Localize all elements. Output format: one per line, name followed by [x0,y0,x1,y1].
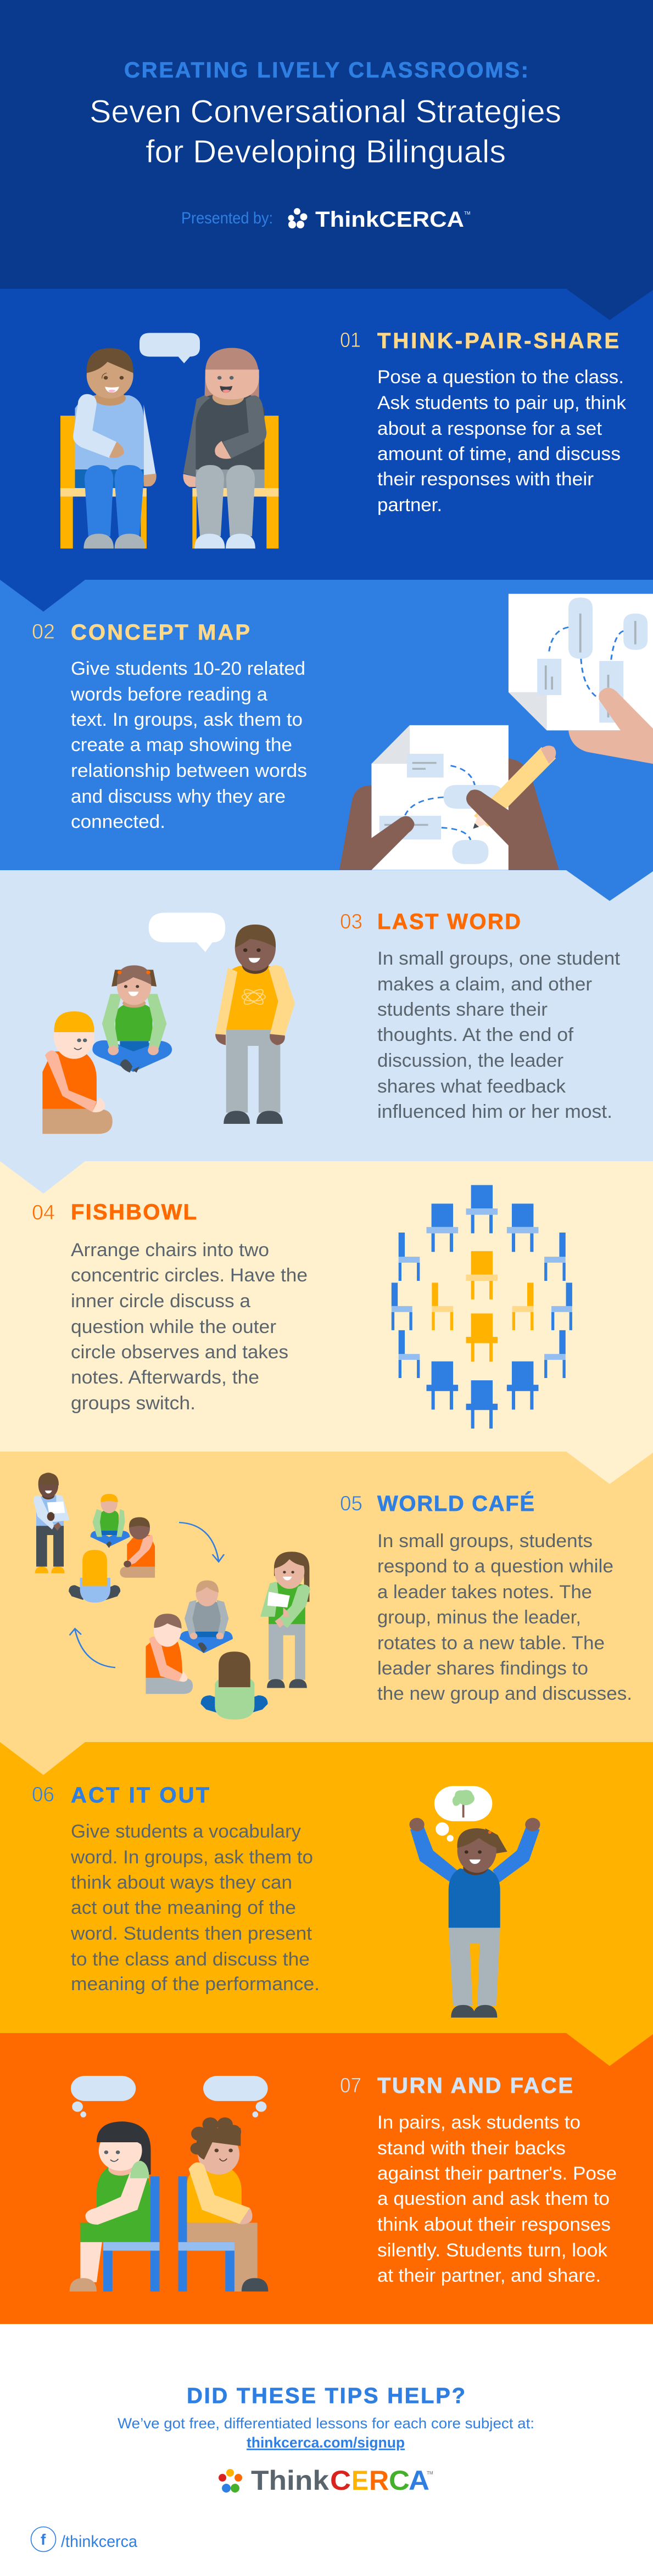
seated orange student [146,1614,193,1694]
panel: 04 fishbowl [0,1161,653,1452]
number 01: 01 [340,329,361,352]
outer circle chairs [392,1185,572,1429]
heading: LAST WORD [377,910,521,934]
logo: ThinkCERCA white: TM [464,211,471,216]
body text: at their partner, and share. [377,2265,601,2286]
signup link: thinkcerca.com/signup [247,2434,405,2451]
title: for Developing Bilinguals [146,134,506,170]
body text: groups switch. [71,1393,196,1414]
body text: words before reading a [70,684,267,705]
icon: facebook [31,2527,56,2552]
body text: their responses with their [377,469,594,490]
seated boy [42,1011,113,1134]
body text: influenced him or her most. [377,1101,612,1122]
thought bubbles [71,2076,268,2118]
illustration: rotating student groups [34,1472,310,1720]
chairs [60,416,278,548]
body text [377,948,621,1122]
panel: 07 turn and face [0,2033,653,2324]
standing leader with notes [34,1472,70,1573]
presented by: Presented by: [181,209,273,227]
notch from panel 06 [566,2033,653,2066]
kicker heading: CREATING LIVELY CLASSROOMS: [124,58,528,82]
body text: think about their responses [377,2214,611,2235]
seated student from behind, blond [69,1550,120,1603]
notch from panel 03 [0,1161,85,1194]
body text: In pairs, ask students to [377,2112,581,2133]
body text: concentric circles. Have the [71,1265,308,1286]
facebook handle: /thinkcerca [61,2533,137,2551]
logo: ThinkCERCA colour: Think [251,2465,329,2496]
body text: think about ways they can [71,1872,292,1893]
body text: relationship between words [71,760,307,781]
number 07: 07 [340,2074,361,2097]
body text: a question and ask them to [377,2188,610,2209]
girl [70,2121,159,2292]
body text: meaning of the performance. [71,1974,320,1995]
body text: to the class and discuss the [71,1949,310,1970]
number 04: 04 [32,1201,55,1224]
left hand and right palm [339,759,559,870]
seated green student [91,1494,130,1548]
body text: rotates to a new table. The [377,1633,605,1654]
body text: discussion, the leader [377,1050,563,1071]
body text: word. Students then present [70,1923,312,1944]
right thumb [466,789,518,845]
boy [178,2118,268,2292]
body text: question while the outer [71,1317,276,1337]
number 06: 06 [32,1783,54,1806]
heading: CONCEPT MAP [71,620,250,645]
hand top right [568,688,653,764]
offer line: We’ve got free, differentiated lessons for each core subject at: [118,2415,534,2432]
illustration: student acting out a tree [409,1786,540,2018]
panel: 01 think-pair-share [0,289,653,580]
body text: makes a claim, and other [377,974,592,995]
illustration: hands and concept map papers [339,594,653,870]
body text: partner. [377,495,442,516]
body text: Pose a question to the class. [377,367,624,388]
body text: text. In groups, ask them to [71,709,303,730]
body text [377,2112,617,2286]
body text [377,367,627,516]
logo: ThinkCERCA colour: C [389,2465,410,2496]
heading: THINK-PAIR-SHARE [377,329,619,353]
body text: create a map showing the [71,735,292,755]
panel: 02 concept map [0,580,653,871]
student left [60,348,278,548]
panel: footer call to action [31,2384,534,2552]
body text: thoughts. At the end of [377,1024,574,1045]
body text: a leader takes notes. The [377,1582,592,1603]
seated grey student [180,1580,233,1653]
student with raised arms [409,1818,540,2018]
body text: amount of time, and discuss [377,444,621,464]
body text: word. In groups, ask them to [70,1847,313,1868]
body text [377,1531,632,1704]
body text: respond to a question while [377,1556,613,1577]
arrows [70,1522,224,1667]
illustration: two seated students talking [60,333,278,548]
question heading: DID THESE TIPS HELP? [187,2384,465,2408]
panel: header [0,0,653,289]
body text: silently. Students turn, look [377,2240,608,2261]
logo: ThinkCERCA white: ThinkCERCA [315,208,464,232]
illustration: students back to back [70,2076,268,2292]
logo: ThinkCERCA colour: C [330,2465,351,2496]
title [90,94,561,170]
notch from header [566,289,653,320]
speech bubble [139,333,200,363]
body text: leader shares findings to [377,1658,588,1679]
body text [70,658,307,832]
number 03: 03 [340,910,362,933]
body text [70,1821,320,1995]
seated girl [92,965,172,1073]
heading: WORLD CAFÉ [377,1491,534,1516]
seated student from behind, brunette [201,1651,268,1720]
heading: FISHBOWL [71,1200,197,1224]
notch from panel 05 [0,1742,85,1775]
inner circle chairs [432,1251,533,1362]
body text: and discuss why they are [71,786,286,807]
number 02: 02 [32,620,55,643]
body text: Arrange chairs into two [71,1240,269,1261]
pencil [473,746,556,829]
top paper [509,594,653,730]
body text: shares what feedback [377,1076,566,1097]
illustration: concentric chairs [392,1185,572,1429]
seated orange student with dark skin [120,1517,155,1578]
standing leader [215,925,295,1124]
standing woman with notes [260,1552,310,1688]
body text: Give students 10-20 related [71,658,305,679]
body text: the new group and discusses. [377,1683,632,1704]
logo: ThinkCERCA colour: R [369,2465,389,2496]
body text: In small groups, one student [377,948,621,969]
number 05: 05 [340,1492,362,1515]
notch from panel 01 [0,580,85,612]
title: Seven Conversational Strategies [90,94,561,130]
illustration: leader and two seated students [42,912,295,1134]
body text: stand with their backs [377,2138,566,2159]
panel: 03 last word [0,870,653,1162]
logo: ThinkCERCA colour: TM [427,2471,433,2476]
body text: notes. Afterwards, the [71,1367,259,1388]
panel: 05 world cafe [0,1452,653,1743]
logo: ThinkCERCA colour: E [351,2465,369,2496]
speech bubble [149,912,225,952]
body text: circle observes and takes [71,1342,288,1363]
logo: ThinkCERCA colour: A [409,2465,429,2496]
body text: group, minus the leader, [377,1607,581,1628]
body text: against their partner's. Pose [377,2163,617,2184]
notch from panel 04 [566,1452,653,1484]
body text: students share their [377,999,548,1020]
body text: Give students a vocabulary [71,1821,301,1842]
logo: ThinkCERCA colour [219,2465,433,2496]
body text: inner circle discuss a [71,1291,250,1312]
body text: Ask students to pair up, think [377,393,627,413]
body text: connected. [71,811,165,832]
heading: TURN AND FACE [377,2074,573,2098]
body text [71,1240,308,1414]
thought bubble with tree [434,1786,492,1841]
chairs [103,2176,235,2292]
body text: In small groups, students [377,1531,593,1552]
heading: ACT IT OUT [71,1783,209,1807]
body text: about a response for a set [377,418,602,439]
notch from panel 02 [566,870,653,901]
icon: facebook: f [41,2531,46,2548]
bottom paper [371,725,509,870]
body text: act out the meaning of the [71,1897,296,1918]
panel: 06 act it out [0,1742,653,2034]
student right [183,348,266,548]
